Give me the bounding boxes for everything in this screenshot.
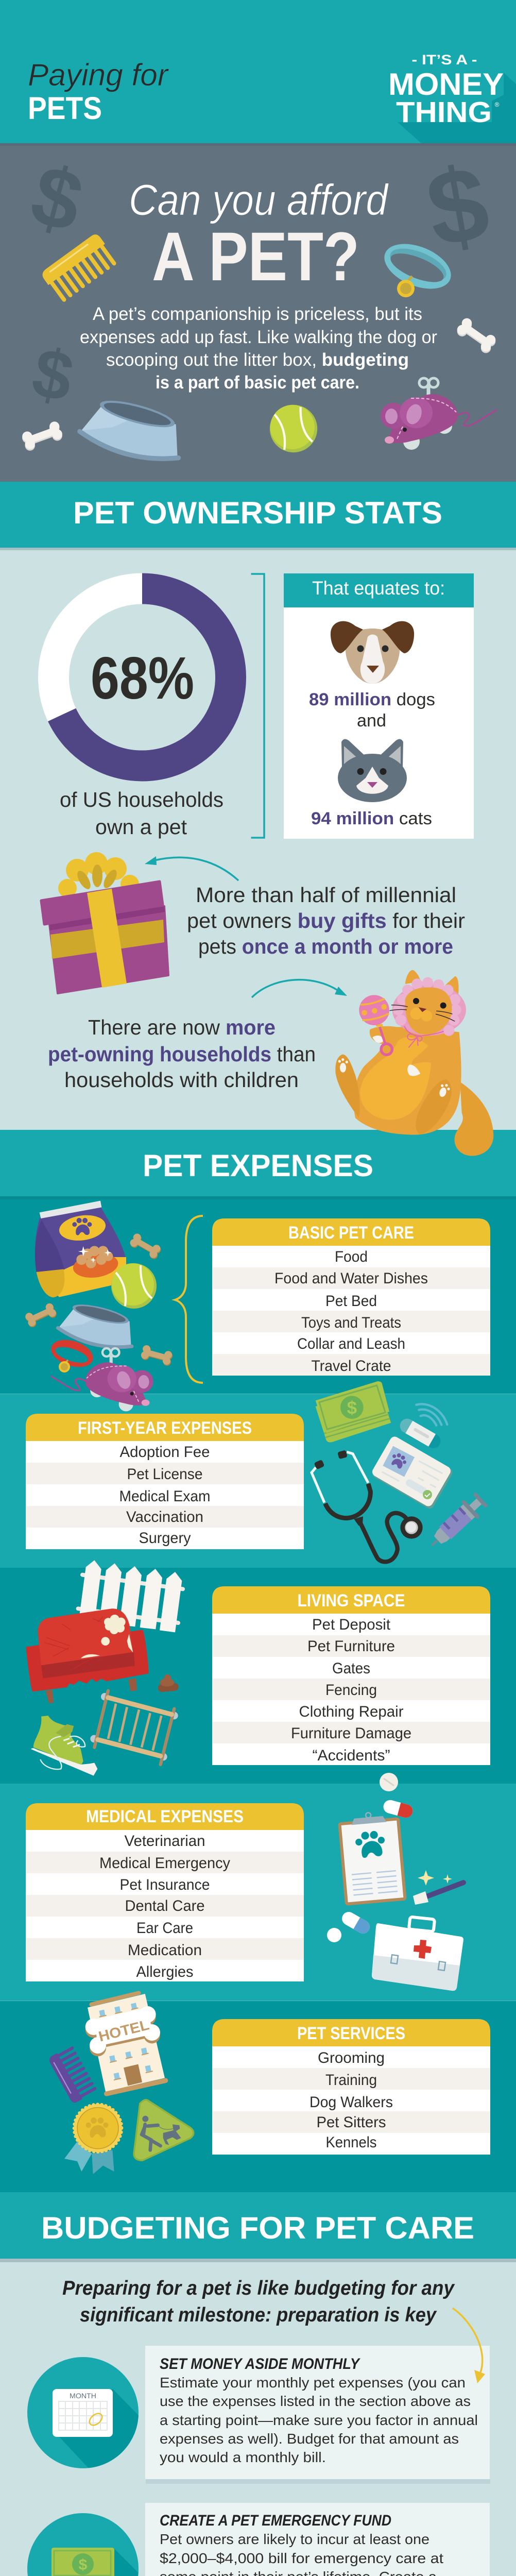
title: Paying for Pets: PETS <box>28 91 102 126</box>
panel: medical expenses table <box>26 1803 304 1981</box>
icon: brace <box>175 1216 203 1383</box>
icon: stethoscope <box>312 1450 423 1562</box>
icon: toy mouse <box>51 1348 153 1411</box>
panel: living space table <box>212 1586 490 1765</box>
icon: cash circle: $ <box>79 2556 88 2573</box>
icon: tennis ball <box>111 1263 157 1309</box>
panel: medical expenses table: MEDICAL EXPENSES <box>86 1807 244 1826</box>
panel: set money aside monthly: a starting point—make sure you factor in annual <box>160 2412 478 2428</box>
icon: blue collar <box>378 235 457 298</box>
text: intro paragraph: A pet’s companionship is priceless, but its <box>93 304 422 324</box>
icon: dollar signs <box>22 143 497 417</box>
icon: tennis ball <box>270 405 317 452</box>
panel: basic pet care table: Pet Bed <box>325 1293 377 1310</box>
icon: calendar circle: MONTH <box>70 2392 96 2400</box>
text: intro paragraph: scooping out the litter box, budgeting <box>106 350 409 370</box>
panel: first-year expenses table: Medical Exam <box>119 1488 210 1505</box>
text: preparation is key lead-in: significant milestone: preparation is key <box>80 2304 437 2326</box>
icon: dollar signs: $ <box>419 143 497 269</box>
icon: chewed sneaker <box>31 1716 97 1776</box>
icon: pet bowl <box>77 392 189 467</box>
panel: set money aside monthly <box>145 2346 490 2484</box>
panel: set money aside monthly: you would a monthly bill. <box>160 2449 326 2465</box>
chart: 68 percent donut: 68% <box>91 645 194 711</box>
panel: pet services table <box>212 2019 490 2155</box>
panel: pet services table: Pet Sitters <box>316 2114 386 2131</box>
heading: Can you afford a pet <box>129 176 389 295</box>
panel: medical expenses table: Medication <box>128 1942 202 1959</box>
icon: white bones <box>21 316 497 452</box>
arrow: yellow curved <box>453 2308 485 2383</box>
panel: living space table: Fencing <box>325 1682 377 1699</box>
text: more pet-owning households stat: pet-owning households than <box>48 1042 316 1066</box>
panel: create a pet emergency fund: CREATE A PET EMERGENCY FUND <box>160 2512 391 2529</box>
icon: poop <box>158 1674 179 1692</box>
text: 94 million cats: 94 million cats <box>311 809 432 828</box>
panel: living space table: “Accidents” <box>312 1747 390 1764</box>
icon: cash circle <box>27 2513 139 2576</box>
heading: pet ownership stats: PET OWNERSHIP STATS <box>73 496 442 530</box>
text: preparation is key lead-in <box>62 2277 455 2326</box>
panel: basic pet care table: Food <box>335 1248 368 1265</box>
icon: pet hotel: HOTEL <box>97 2016 151 2045</box>
icon: red collar <box>48 1335 96 1372</box>
icon: first-year expense illustrations <box>312 1381 490 1562</box>
panel: pet services table: Training <box>325 2072 377 2089</box>
panel: living space table: Gates <box>332 1660 370 1677</box>
panel: pet ownership stats background <box>0 482 516 1132</box>
panel: that equates to <box>284 573 474 839</box>
text: more pet-owning households stat: households with children <box>64 1068 299 1092</box>
text: intro paragraph: expenses add up fast. Like walking the dog or <box>80 327 437 347</box>
icon: gift box <box>41 852 168 993</box>
panel: first-year expenses table: Surgery <box>139 1530 191 1547</box>
text: millennial gifts stat <box>187 883 465 958</box>
panel: basic pet care table <box>212 1218 490 1376</box>
heading: pet expenses: PET EXPENSES <box>143 1148 373 1183</box>
icon: pet ID card <box>371 1435 454 1510</box>
panel: basic pet care table: Toys and Treats <box>301 1314 401 1331</box>
title: Paying for Pets: Paying for <box>28 58 169 92</box>
icon: dog face <box>331 621 414 684</box>
panel: medical expenses table: Medical Emergency <box>99 1855 230 1872</box>
icon: cat face <box>338 739 407 802</box>
logo: It's a Money Thing: MONEY <box>388 67 504 101</box>
text: of US households own a pet: own a pet <box>95 815 187 839</box>
panel: medical expenses table: Dental Care <box>125 1897 205 1914</box>
text: millennial gifts stat: pet owners buy gifts for their <box>187 909 465 933</box>
panel: create a pet emergency fund: Pet owners are likely to incur at least one <box>160 2531 429 2547</box>
icon: bowl <box>56 1298 139 1353</box>
panel: medical expenses table: Veterinarian <box>125 1833 205 1850</box>
panel: create a pet emergency fund <box>145 2503 490 2576</box>
panel: medical expenses table: Ear Care <box>136 1920 193 1937</box>
icon: tan bones <box>24 1232 174 1367</box>
panel: set money aside monthly: SET MONEY ASIDE MONTHLY <box>160 2355 361 2372</box>
arrow: to cat <box>252 980 347 997</box>
icon: wind-up toy mouse <box>381 378 497 450</box>
panel: header band <box>0 0 516 143</box>
panel: budgeting section background <box>0 2192 516 2576</box>
icon: microchip with signal <box>397 1404 447 1451</box>
text: millennial gifts stat: More than half of millennial <box>196 883 456 907</box>
logo: It's a Money Thing: ® <box>495 101 500 108</box>
text: of US households own a pet <box>60 788 223 839</box>
icon: stack of cash <box>316 1381 391 1442</box>
panel: section backgrounds for pet expenses <box>0 1130 516 2192</box>
panel: first-year expenses table: Adoption Fee <box>119 1444 210 1461</box>
icon: yellow comb <box>40 232 117 302</box>
title: Paying for Pets <box>28 58 169 126</box>
text: of US households own a pet: of US households <box>60 788 223 811</box>
panel: living space table: Clothing Repair <box>299 1703 404 1720</box>
icon: fence <box>78 1560 183 1632</box>
text: intro paragraph: is a part of basic pet care. <box>156 372 359 393</box>
icon: syringe <box>424 1490 490 1553</box>
panel: set money aside monthly: use the expenses listed in the section above as <box>160 2393 471 2409</box>
text: 89 million dogs: 89 million dogs <box>309 690 435 709</box>
heading: Can you afford a pet: A PET? <box>152 218 359 295</box>
icon: baby gate <box>90 1691 178 1765</box>
heading: Can you afford a pet: Can you afford <box>129 176 389 224</box>
panel: living space table: Pet Furniture <box>307 1638 395 1655</box>
icon: calendar circle <box>27 2357 139 2468</box>
panel: pet services table: Kennels <box>325 2134 377 2151</box>
icon: first aid kit <box>372 1917 463 1991</box>
panel: pet services table: PET SERVICES <box>297 2024 405 2043</box>
logo: It's a Money Thing: THING <box>396 96 492 129</box>
text: and: and <box>357 711 386 731</box>
panel: basic pet care table: Travel Crate <box>311 1358 391 1375</box>
icon: dollar signs: $ <box>22 146 92 250</box>
icon: medal with ribbons <box>64 2104 122 2174</box>
panel: basic pet care table: BASIC PET CARE <box>288 1223 414 1243</box>
icon: toothbrush with sparkles <box>413 1870 463 1905</box>
logo: It's a Money Thing <box>388 52 504 129</box>
text: intro paragraph <box>80 304 437 393</box>
panel: living space table: LIVING SPACE <box>298 1591 405 1611</box>
icon: purple comb <box>47 2045 96 2104</box>
arrow: to gift <box>145 856 238 880</box>
icon: orange cat in bonnet with rattle <box>335 970 493 1156</box>
chart: 68 percent donut <box>54 588 231 766</box>
panel: first-year expenses table <box>26 1414 304 1549</box>
text: preparation is key lead-in: Preparing for a pet is like budgeting for any <box>62 2277 455 2299</box>
panel: create a pet emergency fund: $2,000–$4,000 bill for emergency care at <box>160 2550 443 2566</box>
panel: medical expenses table: Allergies <box>136 1963 194 1980</box>
panel: pet services table: Grooming <box>318 2049 385 2066</box>
icon: pet hotel <box>85 1993 166 2094</box>
icon: clipboard with paw <box>337 1810 407 1906</box>
panel: pet services table: Dog Walkers <box>309 2094 393 2111</box>
panel: basic pet care table: Collar and Leash <box>297 1335 405 1352</box>
logo: It's a Money Thing: - IT’S A - <box>412 52 477 67</box>
icon: pills <box>327 1773 414 1942</box>
icon: ripped sofa <box>26 1608 149 1703</box>
panel: basic pet care table: Food and Water Dishes <box>274 1270 428 1287</box>
text: millennial gifts stat: pets once a month or more <box>198 935 453 958</box>
panel: set money aside monthly: Estimate your monthly pet expenses (you can <box>160 2375 466 2391</box>
panel: can you afford a pet intro <box>0 143 516 482</box>
panel: that equates to: That equates to: <box>312 578 445 599</box>
text: more pet-owning households stat <box>48 1015 316 1092</box>
panel: first-year expenses table: FIRST-YEAR EXPENSES <box>78 1418 252 1438</box>
icon: pet food bag <box>35 1201 126 1297</box>
icon: dollar signs: $ <box>26 333 80 417</box>
panel: set money aside monthly: expenses as well). Budget for that amount as <box>160 2431 459 2447</box>
panel: medical expenses table: Pet Insurance <box>119 1876 210 1893</box>
heading: budgeting for pet care: BUDGETING FOR PET CARE <box>41 2211 474 2245</box>
panel: first-year expenses table: Pet License <box>127 1466 203 1483</box>
icon: dog walking badge <box>134 2100 194 2160</box>
panel: first-year expenses table: Vaccination <box>126 1509 203 1526</box>
panel: living space table: Furniture Damage <box>291 1725 411 1742</box>
icon: stack of cash: $ <box>347 1398 357 1418</box>
text: more pet-owning households stat: There are now more <box>88 1015 276 1039</box>
panel: living space table: Pet Deposit <box>312 1616 391 1633</box>
